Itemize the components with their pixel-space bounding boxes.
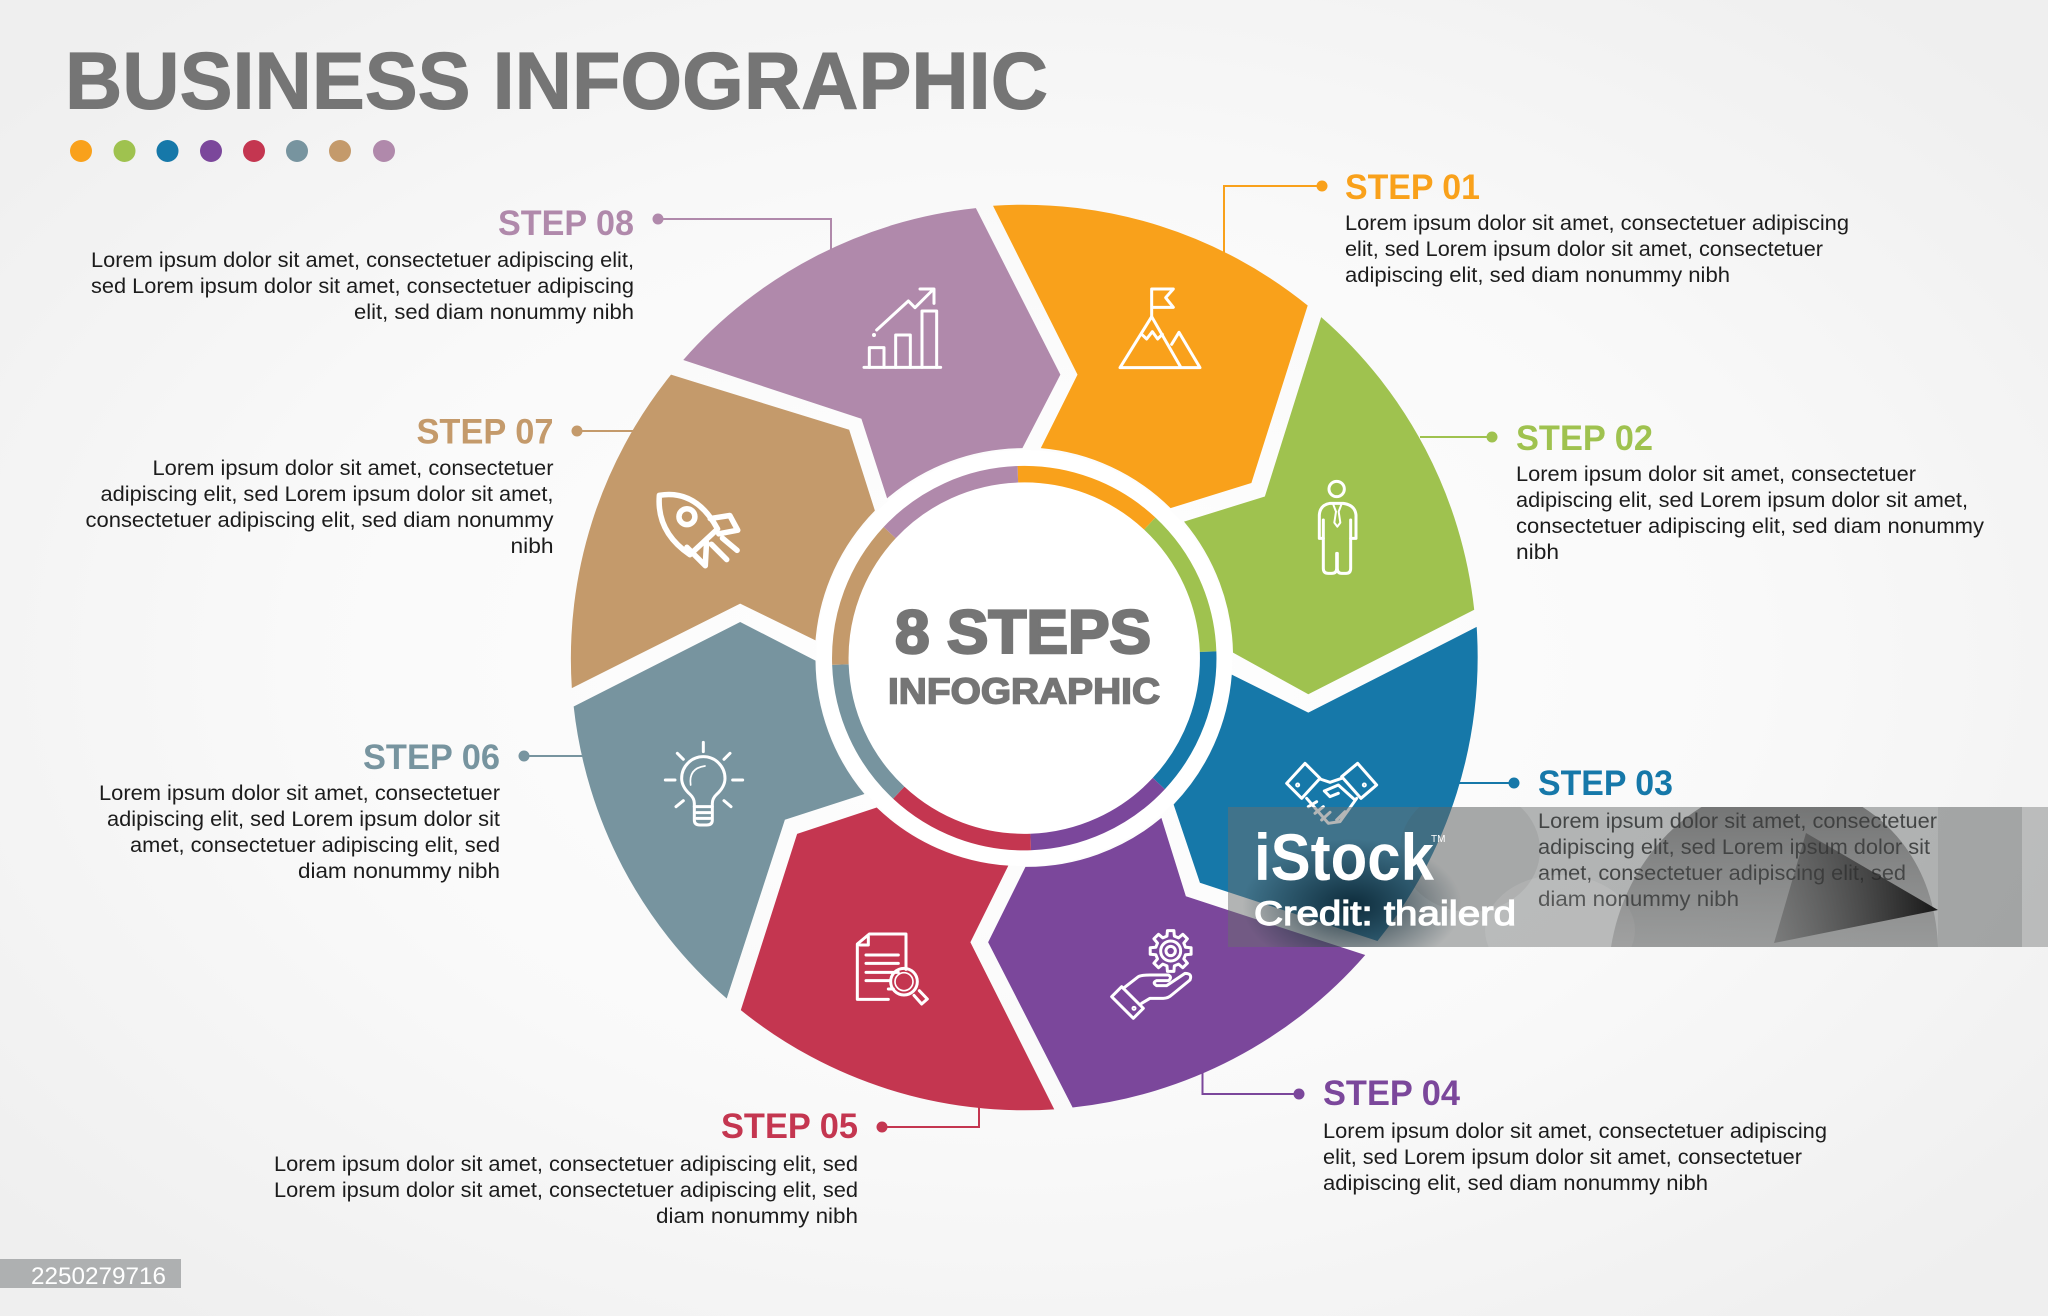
- step 05 text: STEP 05: [721, 1107, 858, 1146]
- icon: growth chart: [864, 289, 941, 367]
- step 02 text: adipiscing elit, sed Lorem ipsum dolor sit amet,: [1516, 488, 1968, 512]
- segment 8 mauve: [683, 208, 1060, 498]
- step 05 text: Lorem ipsum dolor sit amet, consectetuer adipiscing elit, sed: [274, 1152, 858, 1176]
- segment 3 blue: [1174, 627, 1478, 941]
- step 02 text: consectetuer adipiscing elit, sed diam nonummy: [1516, 514, 1984, 538]
- centre heading: INFOGRAPHIC: [888, 670, 1160, 712]
- image id tag: 2250279716: [31, 1263, 166, 1290]
- step 06 text: amet, consectetuer adipiscing elit, sed: [130, 833, 500, 857]
- step 06 text: adipiscing elit, sed Lorem ipsum dolor sit: [107, 807, 500, 831]
- step 04 text: adipiscing elit, sed diam nonummy nibh: [1323, 1171, 1708, 1195]
- step 03 text: adipiscing elit, sed Lorem ipsum dolor sit: [1538, 835, 1930, 859]
- segment 7 tan: [571, 375, 875, 688]
- step 08 text: sed Lorem ipsum dolor sit amet, consectetuer adipiscing: [91, 274, 634, 298]
- colour dots row: [70, 140, 395, 162]
- title: BUSINESS INFOGRAPHIC: [65, 36, 1048, 126]
- segment 4 purple: [988, 818, 1365, 1107]
- icon: light bulb: [665, 742, 743, 825]
- step 06 text: diam nonummy nibh: [298, 859, 500, 883]
- segment 6 teal: [574, 622, 864, 999]
- step 04 text: Lorem ipsum dolor sit amet, consectetuer adipiscing: [1323, 1119, 1827, 1143]
- step 06 text: Lorem ipsum dolor sit amet, consectetuer: [99, 781, 500, 805]
- step 05 text: diam nonummy nibh: [656, 1204, 858, 1228]
- step 03 text: diam nonummy nibh: [1538, 887, 1739, 911]
- step 06 text: [99, 738, 500, 883]
- step 02 text: Lorem ipsum dolor sit amet, consectetuer: [1516, 462, 1916, 486]
- step 08 text: Lorem ipsum dolor sit amet, consectetuer adipiscing elit,: [91, 248, 634, 272]
- step 04 text: [1323, 1074, 1827, 1195]
- step 04 text: STEP 04: [1323, 1074, 1461, 1113]
- step 02 text: [1516, 419, 1984, 564]
- step 05 text: Lorem ipsum dolor sit amet, consectetuer adipiscing elit, sed: [274, 1178, 858, 1202]
- centre heading: [888, 598, 1160, 712]
- icon: handshake: [1287, 763, 1377, 823]
- icon: businessman: [1319, 481, 1356, 573]
- step 01 text: Lorem ipsum dolor sit amet, consectetuer adipiscing: [1345, 211, 1849, 235]
- icon: rocket: [659, 494, 738, 566]
- step 08 text: elit, sed diam nonummy nibh: [354, 300, 634, 324]
- step 03 text: amet, consectetuer adipiscing elit, sed: [1538, 861, 1906, 885]
- watermark trademark: TM: [1431, 834, 1445, 845]
- inner colour ring: [840, 474, 1208, 842]
- step 07 text: [86, 412, 554, 558]
- step 07 text: STEP 07: [416, 412, 554, 452]
- step 03 text: Lorem ipsum dolor sit amet, consectetuer: [1538, 809, 1937, 833]
- watermark credit: Credit: thailerd: [1254, 895, 1516, 933]
- segment 2 green: [1184, 317, 1474, 694]
- image id tag: [0, 1259, 181, 1290]
- step 01 text: STEP 01: [1345, 168, 1480, 207]
- step 01 text: elit, sed Lorem ipsum dolor sit amet, consectetuer: [1345, 237, 1823, 261]
- leader lines and dots: [518, 180, 1520, 1132]
- icon: gear on hand: [1112, 931, 1191, 1018]
- step 03 text: STEP 03: [1538, 764, 1673, 803]
- step 06 text: STEP 06: [363, 738, 500, 777]
- step 07 text: Lorem ipsum dolor sit amet, consectetuer: [152, 456, 554, 480]
- watermark logo: iStock: [1254, 820, 1434, 894]
- step 02 text: nibh: [1516, 540, 1559, 564]
- icon: mountain flag: [1120, 289, 1200, 368]
- step 07 text: nibh: [510, 534, 554, 558]
- step 07 text: adipiscing elit, sed Lorem ipsum dolor sit amet,: [100, 482, 554, 506]
- step 05 text: [274, 1107, 858, 1228]
- step 02 text: STEP 02: [1516, 419, 1653, 458]
- step 01 text: adipiscing elit, sed diam nonummy nibh: [1345, 263, 1730, 287]
- step 08 text: [91, 204, 634, 324]
- segment 5 red: [741, 808, 1054, 1110]
- step 07 text: consectetuer adipiscing elit, sed diam nonummy: [86, 508, 554, 532]
- step 08 text: STEP 08: [498, 204, 634, 243]
- step 04 text: elit, sed Lorem ipsum dolor sit amet, consectetuer: [1323, 1145, 1802, 1169]
- centre white disc: [816, 450, 1232, 866]
- watermark band: [1228, 807, 2048, 947]
- segment 1 orange: [993, 205, 1308, 508]
- step 01 text: [1345, 168, 1849, 287]
- centre heading: 8 STEPS: [895, 598, 1151, 666]
- step 03 text: [1538, 764, 1937, 911]
- icon: document search: [857, 934, 927, 1004]
